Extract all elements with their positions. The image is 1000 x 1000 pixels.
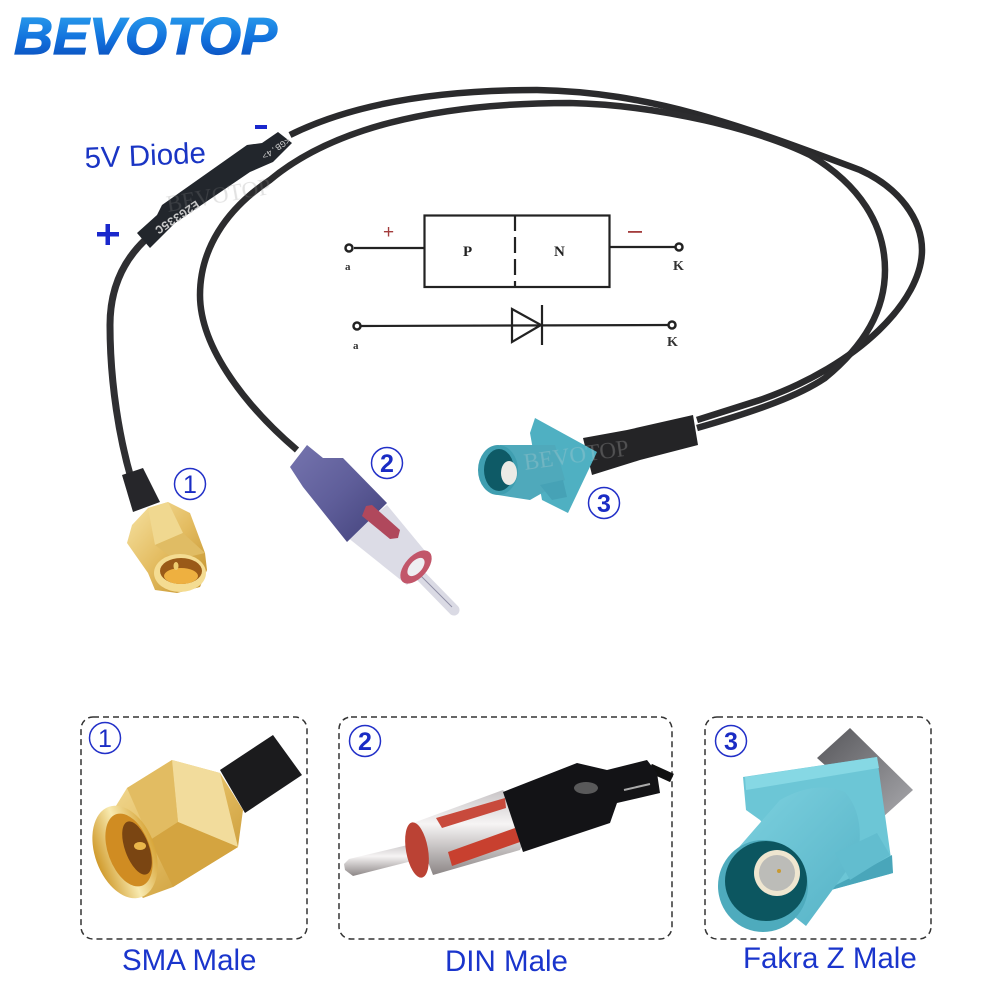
- panel 3: Fakra Z Male: [705, 717, 931, 939]
- connector: DIN male small: [290, 445, 454, 610]
- number badge 1: 1: [98, 725, 112, 753]
- number badge 1 top: [174, 468, 206, 500]
- connector: SMA male small: [122, 468, 207, 593]
- number badge 1 top: 1: [183, 471, 197, 499]
- cable: negative branch from diode to Fakra: [290, 90, 922, 420]
- number badge 2 top: 2: [380, 450, 394, 478]
- cable: DIN to Fakra: [200, 103, 885, 450]
- number badge 2: [350, 726, 380, 756]
- number badge 2 top: [372, 448, 402, 478]
- diode heat shrink: [137, 132, 292, 248]
- diode heat shrink: <GB.4>: [259, 135, 292, 161]
- caption: SMA Male: SMA Male: [122, 944, 256, 977]
- label: minus sign: [255, 125, 267, 129]
- label: plus sign: [97, 224, 119, 245]
- cable: positive branch from diode to SMA: [110, 240, 145, 478]
- diagram: PN junction and diode symbol: [345, 215, 684, 352]
- Fakra Z male large connector: [718, 728, 913, 932]
- number badge 2: 2: [358, 728, 372, 756]
- diode symbol: K: [667, 335, 678, 350]
- panel 1: SMA Male: [80, 717, 307, 939]
- number badge 3: 3: [724, 728, 738, 756]
- caption: Fakra Z Male: Fakra Z Male: [743, 942, 917, 975]
- diode symbol: a: [353, 340, 359, 352]
- diode heat shrink: E2G335C: [152, 197, 202, 236]
- diode symbol: [353, 305, 678, 352]
- number badge 3 top: 3: [597, 490, 611, 518]
- number badge 1: [90, 722, 120, 754]
- watermark text: [165, 174, 630, 475]
- watermark text: BEVOTOP: [165, 174, 273, 217]
- logo: BEVOTOP: BEVOTOP: [14, 8, 277, 66]
- PN block: [345, 215, 684, 287]
- label: 5V Diode: 5V Diode: [84, 137, 207, 175]
- PN block: P: [463, 244, 472, 260]
- connector: Fakra Z small with heat shrink: [478, 415, 698, 513]
- PN block: +: [383, 222, 394, 243]
- number badge 3 top: [588, 488, 620, 518]
- PN block: K: [673, 259, 684, 274]
- number badge 3: [716, 726, 746, 756]
- SMA male large connector: [80, 735, 302, 907]
- PN block: a: [345, 261, 351, 273]
- watermark text: BEVOTOP: [522, 435, 630, 475]
- panel 2: DIN Male: [339, 717, 672, 939]
- PN block: N: [554, 244, 565, 260]
- DIN male large connector: [344, 760, 672, 879]
- caption: DIN Male: DIN Male: [445, 945, 568, 978]
